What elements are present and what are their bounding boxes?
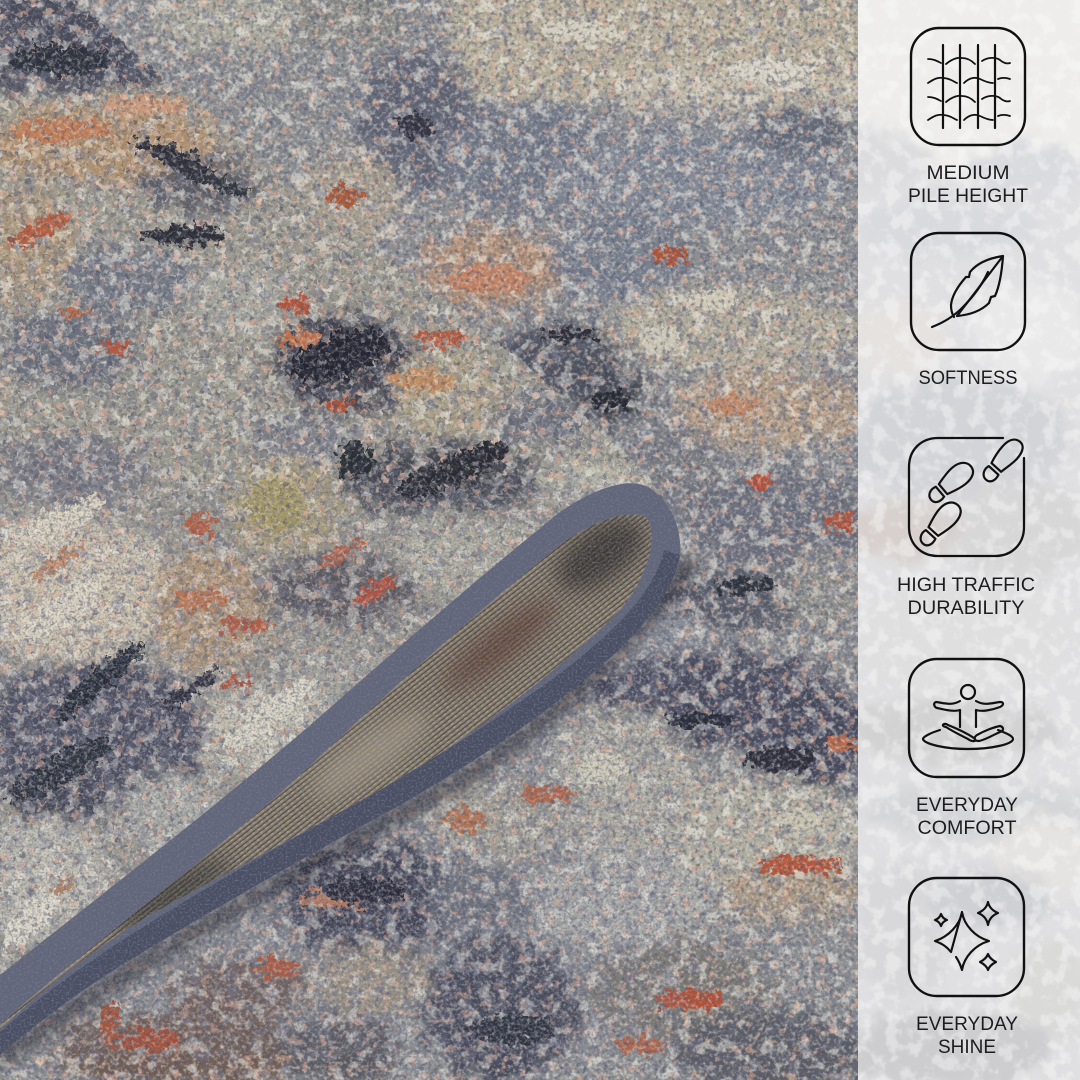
label: everyday comfort: COMFORT [918, 818, 1017, 839]
label: high traffic durability: HIGH TRAFFIC [897, 575, 1035, 596]
feature: medium pile height [908, 28, 1028, 207]
label: medium pile height [908, 163, 1028, 207]
label: high traffic durability: DURABILITY [908, 598, 1025, 619]
label: everyday shine: EVERYDAY [916, 1014, 1018, 1035]
label: medium pile height: PILE HEIGHT [908, 186, 1028, 207]
icon: sparkles [909, 878, 1024, 996]
feature: softness [911, 233, 1025, 389]
label: everyday shine [916, 1014, 1018, 1058]
label: everyday shine: SHINE [938, 1037, 996, 1058]
label: high traffic durability [897, 575, 1035, 619]
label: softness: SOFTNESS [918, 368, 1018, 389]
icon: pile fibres [911, 28, 1025, 145]
label: everyday comfort: EVERYDAY [916, 795, 1018, 816]
photo: rolled rug pile surface [0, 0, 700, 1000]
label: everyday comfort [916, 795, 1018, 839]
feature: everyday comfort [909, 659, 1024, 839]
label: medium pile height: MEDIUM [926, 163, 1010, 184]
icon: footprints [909, 435, 1027, 556]
rug binding edge [0, 483, 680, 1055]
icon: feather [911, 233, 1025, 350]
feature: high traffic durability [897, 435, 1035, 619]
feature: everyday shine [909, 878, 1024, 1058]
icon: seated figure [909, 659, 1024, 777]
panel: feature sidebar [858, 0, 1080, 1080]
rug backing weave [0, 505, 656, 1030]
